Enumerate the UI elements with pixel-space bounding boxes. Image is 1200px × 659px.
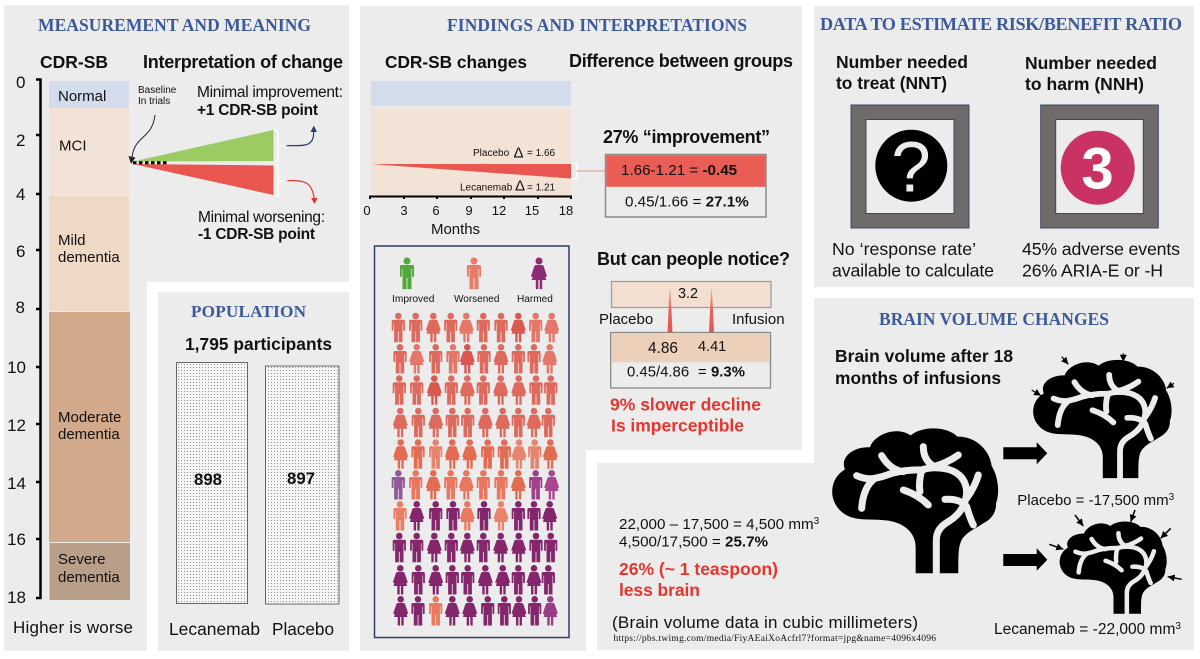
stacked severity bar: dementia	[58, 569, 120, 586]
stacked severity bar: Normal	[58, 88, 106, 105]
baseline note with arrow	[128, 85, 177, 164]
heading: CDR-SB changes: CDR-SB changes	[385, 52, 527, 72]
diagram: imperceptible difference: Infusion	[732, 311, 785, 328]
callout: 27% improvement: 1.66-1.21 = -0.45	[621, 162, 738, 179]
stacked severity bar: dementia	[58, 249, 120, 266]
label: placebo volume: 3	[1169, 492, 1175, 503]
CDR-SB scale axis: 8	[16, 298, 25, 317]
CDR-SB scale axis: 12	[7, 416, 26, 435]
diagram: imperceptible difference: Placebo	[599, 311, 653, 328]
legend: worsened: Worsened	[454, 294, 499, 305]
chart: CDR-SB change over months: Δ	[515, 178, 525, 195]
legend: harmed: Harmed	[517, 294, 553, 305]
bar: lecanemab arm	[169, 362, 260, 639]
heading: findings and interpretations: FINDINGS AND INTERPRETATIONS	[447, 15, 747, 35]
heading: population: POPULATION	[191, 302, 307, 321]
heading: CDR-SB: CDR-SB	[40, 52, 108, 72]
column: number needed to harm: Number needed	[1025, 53, 1157, 73]
heading: data to estimate risk/benefit ratio: DATA TO ESTIMATE RISK/BENEFIT RATIO	[820, 14, 1182, 34]
conclusion: 9% slower decline	[610, 394, 761, 436]
calculation text: 4,500/17,500 = 25.7%	[619, 534, 769, 551]
stacked severity bar: Moderate	[58, 409, 121, 426]
bar: lecanemab arm: 898	[194, 470, 222, 489]
CDR-SB scale axis: 4	[16, 185, 26, 204]
stacked severity bar: Mild	[58, 232, 86, 249]
diagram: imperceptible difference	[599, 282, 785, 388]
column: number needed to harm	[1022, 53, 1180, 281]
chart: CDR-SB change over months: 3	[400, 203, 408, 218]
column: number needed to harm: 26% ARIA-E or -H	[1022, 261, 1163, 281]
conclusion: less brain: 26% (~ 1 teaspoon)	[619, 559, 778, 579]
bar: lecanemab arm: Lecanemab	[169, 619, 260, 639]
CDR-SB scale axis: 6	[16, 242, 26, 261]
note: units: (Brain volume data in cubic millimeters)	[612, 613, 918, 632]
caption: higher is worse: Higher is worse	[13, 618, 133, 637]
participants count: 1,795 participants	[185, 334, 332, 354]
chart: CDR-SB change over months: 6	[432, 203, 440, 218]
arrow: to lecanemab brain	[1003, 548, 1047, 571]
stacked severity bar: dementia	[58, 426, 120, 443]
chart: CDR-SB change over months: 0	[363, 203, 371, 218]
callout: 27% improvement: 27% “improvement”	[603, 127, 770, 147]
diagram: imperceptible difference: 3.2	[678, 286, 698, 302]
diagram: imperceptible difference: 9.3%	[711, 365, 745, 381]
panel: data to estimate risk/benefit ratio	[814, 6, 1194, 287]
heading: but can people notice: But can people notice?	[597, 249, 790, 269]
arrow: improvement up	[286, 126, 317, 146]
source url: https://pbs.twimg.com/media/FiyAEaiXoAcfrl7?format=jpg&name=4096x4096	[614, 633, 936, 644]
calculation text	[619, 516, 820, 551]
icon: number 3 in frame: 3	[1081, 136, 1114, 202]
CDR-SB scale axis	[7, 73, 40, 607]
callout: 27% improvement	[603, 127, 770, 217]
conclusion: less brain: less brain	[619, 580, 700, 600]
green improvement wedge	[133, 130, 274, 162]
column: number needed to treat: No ‘response rate’	[832, 239, 976, 259]
label: minimal worsening: Minimal worsening:	[198, 209, 325, 226]
stacked severity bar: MCI	[59, 138, 86, 154]
diagram: imperceptible difference: 0.45/4.86	[627, 365, 689, 381]
column: number needed to treat: Number needed	[836, 52, 968, 72]
label: minimal improvement: +1 CDR-SB point	[197, 102, 318, 119]
icon: question mark in frame: ?	[891, 128, 931, 208]
shrink arrows: lecanemab	[1049, 510, 1182, 579]
chart: CDR-SB change over months: 15	[525, 203, 539, 218]
arrow: worsening down	[287, 181, 318, 204]
baseline dotted line	[133, 161, 168, 164]
stacked severity bar: Severe	[58, 551, 106, 568]
conclusion: 9% slower decline: 9% slower decline	[610, 394, 761, 414]
column: number needed to treat	[832, 52, 994, 281]
chart: CDR-SB change over months: Months	[431, 221, 480, 238]
chart: CDR-SB change over months: Lecanemab	[460, 182, 513, 194]
label: minimal worsening: -1 CDR-SB point	[198, 226, 315, 243]
icon: question mark in frame	[851, 105, 969, 228]
CDR-SB scale axis: 14	[7, 474, 26, 493]
CDR-SB scale axis: 0	[16, 73, 26, 92]
CDR-SB scale axis: 10	[7, 358, 26, 377]
chart: CDR-SB change over months: = 1.21	[527, 182, 556, 194]
label: placebo volume: Placebo = -17,500 mm	[1017, 492, 1169, 509]
subheading: brain volume after 18 months: months of infusions	[835, 368, 1001, 388]
bar: placebo arm: 897	[287, 469, 315, 488]
chart: CDR-SB change over months: 9	[465, 203, 473, 218]
subheading: brain volume after 18 months	[835, 346, 1013, 388]
diagram: imperceptible difference: 4.41	[698, 339, 726, 355]
heading: difference between groups: Difference between groups	[569, 51, 793, 71]
baseline note with arrow: In trials	[138, 96, 170, 107]
legend: harmed	[517, 258, 553, 305]
label: lecanemab volume: Lecanemab = -22,000 mm	[994, 621, 1175, 638]
brackets	[274, 130, 284, 196]
conclusion: less brain	[619, 559, 778, 600]
people icon array	[374, 246, 569, 638]
bar: placebo arm: Placebo	[272, 619, 334, 639]
shrink arrows: placebo	[1032, 353, 1174, 396]
panel: findings and interpretations	[360, 6, 802, 651]
diagram: imperceptible difference: =	[698, 365, 707, 381]
chart: CDR-SB change over months: 12	[492, 203, 506, 218]
icon: placebo brain	[1033, 360, 1172, 480]
CDR-SB scale axis: 2	[16, 131, 26, 150]
callout: 27% improvement: 0.45/1.66 = 27.1%	[625, 194, 749, 210]
chart: CDR-SB change over months: = 1.66	[527, 148, 556, 159]
arrow: to placebo brain	[1003, 442, 1047, 464]
panel: brain volume changes	[597, 298, 1194, 650]
legend: worsened	[454, 258, 499, 305]
icon: number 3 in frame	[1041, 105, 1158, 228]
chart: CDR-SB change over months: 18	[559, 203, 573, 218]
icon: baseline brain	[832, 428, 998, 575]
label: lecanemab volume: 3	[1175, 621, 1181, 632]
baseline note with arrow: Baseline	[138, 85, 177, 96]
subheading: brain volume after 18 months: Brain volume after 18	[835, 346, 1013, 366]
diagram: imperceptible difference: 4.86	[648, 340, 678, 357]
bar: placebo arm	[266, 366, 339, 639]
CDR-SB scale axis: 18	[7, 588, 26, 607]
heading: interpretation of change: Interpretation of change	[143, 52, 343, 72]
chart: CDR-SB change over months: Δ	[514, 145, 524, 162]
column: number needed to treat: to treat (NNT)	[836, 73, 947, 93]
label: minimal improvement: Minimal improvement:	[197, 84, 343, 101]
stacked severity bar	[49, 81, 130, 600]
chart: CDR-SB change over months: Placebo	[473, 148, 510, 159]
legend: improved: Improved	[392, 294, 435, 305]
panel: measurement and meaning	[4, 5, 349, 651]
calculation text: 22,000 – 17,500 = 4,500 mm	[619, 516, 814, 533]
CDR-SB scale axis: 16	[7, 530, 26, 549]
column: number needed to harm: to harm (NNH)	[1025, 74, 1144, 94]
legend: improved	[392, 258, 435, 305]
icon grid: worsened and harmed participants	[392, 313, 559, 626]
calculation text: 3	[814, 516, 820, 527]
heading: brain volume changes: BRAIN VOLUME CHANGES	[879, 309, 1109, 329]
panel: population	[158, 292, 349, 651]
icon: lecanemab brain	[1060, 522, 1167, 615]
red worsening wedge	[133, 164, 274, 195]
label: minimal improvement	[197, 84, 343, 119]
column: number needed to harm: 45% adverse events	[1022, 239, 1180, 259]
conclusion: 9% slower decline: Is imperceptible	[611, 416, 744, 436]
chart: CDR-SB change over months	[363, 81, 606, 238]
label: minimal worsening	[198, 209, 325, 243]
column: number needed to treat: available to calculate	[832, 261, 994, 281]
heading: measurement and meaning: MEASUREMENT AND MEANING	[38, 15, 311, 35]
